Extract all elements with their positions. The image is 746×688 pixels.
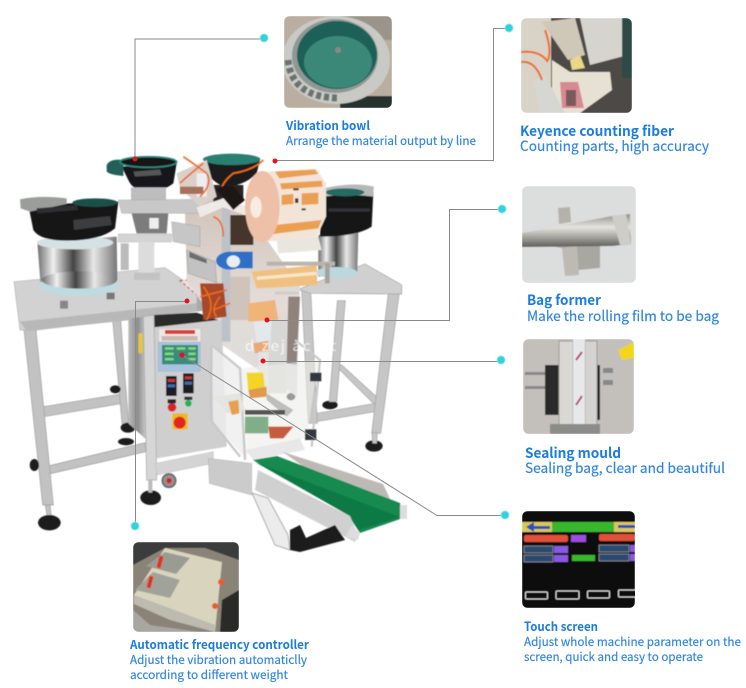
main cabinet <box>128 317 147 440</box>
heading: Vibration bowl <box>285 117 370 134</box>
caster wheel <box>162 474 176 487</box>
feeding chute and stand <box>118 199 217 283</box>
description: Arrange the material output by line <box>286 132 476 149</box>
right bowl <box>316 185 374 278</box>
guard door <box>211 340 321 460</box>
heading: Sealing mould <box>525 443 621 463</box>
description: Sealing bag, clear and beautiful <box>525 458 725 478</box>
heading: Keyence counting fiber <box>520 121 675 141</box>
photo: frequency controller <box>133 542 239 632</box>
leg pin <box>148 479 152 493</box>
left table legs and crossbars <box>24 320 146 518</box>
watermark: d zej ac .lt <box>245 335 338 356</box>
panel: vibration bowl <box>282 16 476 149</box>
photo: sealing mould <box>523 339 634 434</box>
packing machine <box>14 154 407 552</box>
conveyor <box>252 452 407 552</box>
line: vibration bowl <box>135 39 262 159</box>
red markers <box>132 156 278 364</box>
lower box <box>208 458 252 495</box>
back of central column <box>185 193 300 397</box>
back left bowl <box>107 157 177 200</box>
photo: Keyence <box>521 18 632 113</box>
description: Counting parts, high accuracy <box>520 136 710 156</box>
photo: touch screen <box>522 511 640 608</box>
description: Adjust the vibration automaticlly <box>130 651 308 668</box>
wire details dark <box>217 186 245 210</box>
line: frequency controller <box>136 302 187 522</box>
blue motor <box>216 252 253 270</box>
feet <box>30 385 383 530</box>
photo: vibration bowl <box>282 16 392 108</box>
panel: touch screen <box>522 511 741 665</box>
description: Adjust whole machine parameter on the <box>524 633 741 650</box>
central frame <box>177 160 300 393</box>
right table <box>298 264 402 443</box>
line: Keyence <box>275 28 506 160</box>
machine body and tables <box>14 154 402 530</box>
panel: automatic frequency controller <box>129 542 310 683</box>
heading: Touch screen <box>524 616 598 635</box>
film roll <box>245 169 335 288</box>
leader lines <box>135 28 506 522</box>
photo: bag former <box>522 186 636 283</box>
forming tube <box>248 292 298 392</box>
line: touch screen <box>182 355 501 516</box>
control panel <box>158 329 201 429</box>
teal dots <box>131 24 513 530</box>
description: Make the rolling film to be bag <box>527 306 719 326</box>
wires <box>180 157 263 320</box>
line: sealing mould <box>263 360 498 362</box>
left table top <box>14 268 206 330</box>
left bowl <box>20 197 119 309</box>
heading: Automatic frequency controller <box>129 636 310 653</box>
panel: bag former <box>522 186 719 326</box>
line: bag former <box>267 210 499 320</box>
panel: Keyence counting fiber <box>520 18 710 156</box>
red marks on table <box>180 280 207 298</box>
description: screen, quick and easy to operate <box>524 648 703 665</box>
panel: sealing mould <box>523 339 725 478</box>
back centre bowl <box>203 154 260 202</box>
heading: Bag former <box>527 290 602 310</box>
description: according to different weight <box>130 666 288 683</box>
